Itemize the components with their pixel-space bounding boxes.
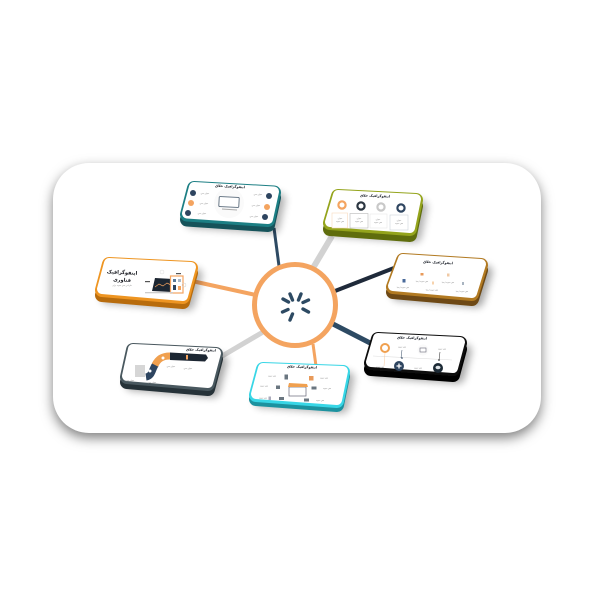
icons and labels: متن نمونه: [320, 378, 328, 380]
subtitle: طراحی متن نمونه برای: [112, 284, 132, 287]
connector: black card: [333, 324, 376, 346]
icon: storefront: [288, 383, 308, 396]
boxes with text: عنوان: [376, 218, 380, 221]
central hub circle: [254, 264, 336, 346]
icons and labels: متن نمونه: [323, 388, 331, 390]
boxes with text: عنوان: [357, 217, 361, 220]
labels: عنوان متن: [148, 381, 156, 384]
icons and labels: متن نمونه اینجا: [396, 286, 409, 289]
labels: عنوان متن: [126, 379, 134, 382]
labels: عنوان متن: [184, 367, 192, 370]
icons and labels: متن نمونه: [260, 386, 268, 388]
card: olive pins: [330, 192, 421, 236]
card: slate arrow path: [126, 346, 221, 391]
heading: اینفوگرافیک خلاق: [186, 346, 216, 353]
icons and labels: [396, 273, 468, 293]
boxes with text: متن نمونه: [355, 221, 363, 223]
boxes with text: [332, 213, 408, 230]
timeline: متن نمونه: [438, 348, 446, 350]
icons and labels: متن نمونه: [316, 400, 324, 402]
illustration: dashboard: [145, 270, 186, 293]
card: orange tech cover: فناوری: [113, 277, 131, 284]
heading: اینفوگرافیک خلاق: [360, 192, 390, 199]
icon: monitor: [214, 188, 244, 218]
boxes with text: عنوان: [338, 217, 342, 220]
labels: عنوان متن: [167, 365, 175, 368]
connector: orange card: [192, 281, 256, 295]
markers and labels: عنوان متن: [250, 215, 258, 218]
heading: اینفوگرافیک خلاق: [423, 259, 453, 265]
boxes with text: متن نمونه: [395, 223, 403, 225]
background panel: [53, 163, 541, 433]
markers and labels: [185, 190, 272, 220]
markers and labels: عنوان متن: [200, 202, 208, 205]
heading: اینفوگرافیک خلاق: [215, 183, 245, 189]
markers and labels: عنوان متن: [201, 192, 209, 195]
pins: [338, 201, 405, 212]
icons and labels: متن نمونه اینجا: [441, 281, 454, 284]
card: orange tech cover: [102, 263, 196, 304]
icons and labels: متن نمونه اینجا: [425, 288, 438, 292]
markers and labels: عنوان متن: [252, 204, 260, 207]
arrow band: [135, 352, 208, 377]
timeline: متن نمونه: [414, 368, 422, 370]
connector: olive card: [313, 236, 332, 268]
icons and labels: متن نمونه اینجا: [455, 290, 468, 293]
boxes with text: متن نمونه: [374, 222, 382, 224]
card: cyan store: [256, 363, 348, 407]
heading: اینفوگرافیک خلاق: [287, 363, 317, 370]
card: black timeline: [371, 334, 465, 377]
markers and labels: عنوان متن: [254, 193, 262, 196]
labels: [126, 365, 192, 384]
card: teal monitor: [185, 183, 279, 227]
icons and labels: [259, 374, 331, 402]
connector: slate card: [212, 332, 263, 362]
card: brown icons: [393, 259, 486, 301]
connector: brown card: [335, 268, 394, 291]
timeline: متن نمونه: [376, 366, 384, 368]
connector: cyan card: [313, 344, 316, 366]
timeline: متن نمونه: [398, 346, 406, 348]
heading: اینفوگرافیک: [107, 268, 138, 277]
connector: teal card: [274, 228, 279, 266]
icons and labels: متن نمونه: [259, 398, 267, 400]
markers and labels: عنوان متن: [198, 212, 206, 215]
icon: loading spinner: [282, 294, 308, 320]
boxes with text: عنوان: [397, 219, 401, 222]
icons and labels: متن نمونه: [268, 376, 276, 378]
icons and labels: متن نمونه اینجا: [415, 280, 428, 283]
boxes with text: متن نمونه: [336, 221, 344, 223]
timeline: [373, 344, 452, 373]
heading: اینفوگرافیک خلاق: [397, 334, 427, 341]
